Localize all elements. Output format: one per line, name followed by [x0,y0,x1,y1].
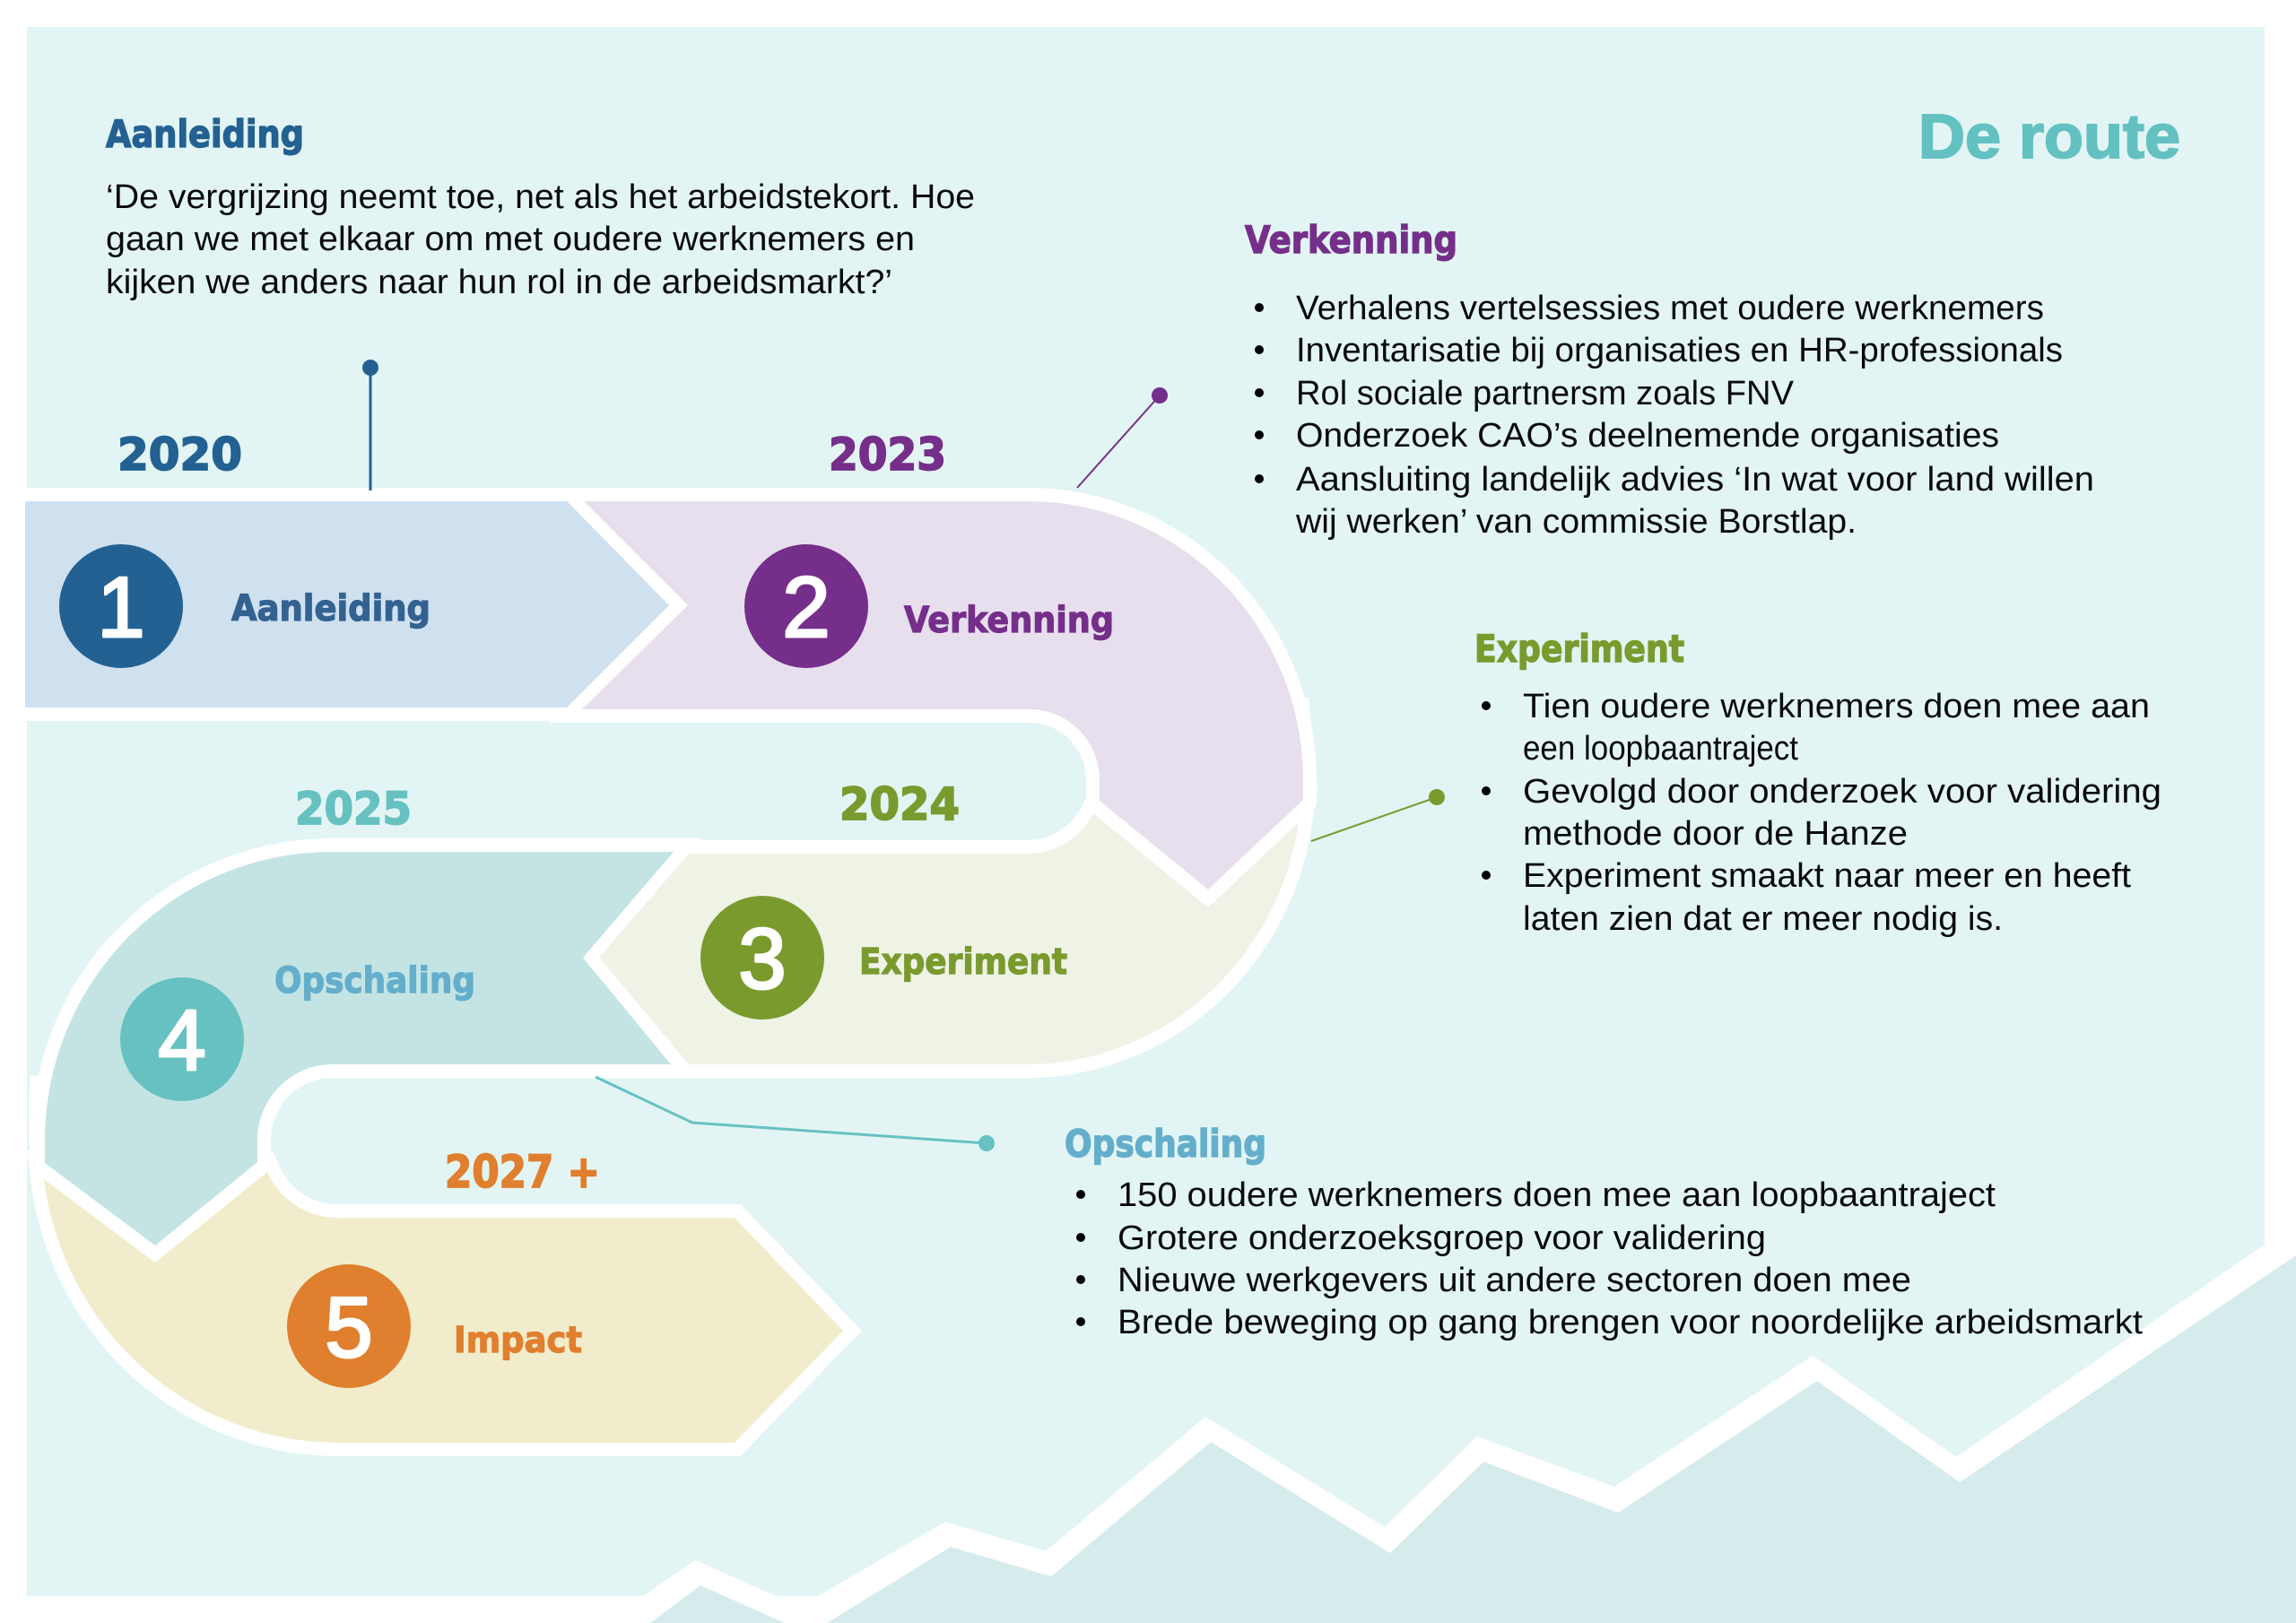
text block: Experiment: methode door de Hanze [1523,815,1908,853]
year 2027 +: 2027 + [445,1146,600,1198]
text block: Verkenning [1245,218,2094,541]
text block: Experiment [1474,627,2161,938]
year 2020: 2020 [117,429,242,481]
step 2: Verkenning [582,501,1303,890]
text block: Aanleiding: ‘De vergrijzing neemt toe, net als het arbeidstekort. Hoe [106,178,975,216]
year 2024: 2024 [839,778,960,830]
text block: Opschaling: Nieuwe werkgevers uit andere sectoren doen mee [1118,1262,1911,1299]
step 5: Impact: Impact [454,1320,582,1361]
text block: Opschaling: Brede beweging op gang brengen voor noordelijke arbeidsmarkt [1118,1304,2143,1341]
step 4: Opschaling: Opschaling [274,960,475,1002]
text block: Experiment: Experiment smaakt naar meer en heeft [1523,857,2131,895]
text block: Verkenning: Verkenning [1245,218,1457,262]
connector: Aanleiding pin [362,360,378,490]
text block: Verkenning: Verhalens vertelsessies met oudere werknemers [1296,290,2044,327]
text block: Aanleiding [106,112,975,301]
text block: Opschaling [1065,1122,2143,1341]
step 3: Experiment [599,813,1299,1064]
text block: Opschaling: Opschaling [1065,1122,1266,1166]
text block: Experiment: laten zien dat er meer nodig is. [1523,900,2003,938]
text block: Verkenning: Inventarisatie bij organisaties en HR-professionals [1296,332,2063,369]
text block: Aanleiding: kijken we anders naar hun rol in de arbeidsmarkt?’ [106,264,892,301]
text block: Opschaling: 150 oudere werknemers doen mee aan loopbaantraject [1118,1176,1996,1214]
connector: Verkenning pin [1077,387,1168,488]
white route outline [25,501,1317,1443]
text block: Verkenning: wij werken’ van commissie Borstlap. [1295,503,1857,541]
step 5: Impact [44,1172,843,1443]
step 1: Aanleiding: Aanleiding [231,588,430,629]
text block: Experiment: een loopbaantraject [1523,730,1798,768]
step 4: Opschaling: 4 [158,993,206,1089]
text block: Verkenning: Onderzoek CAO’s deelnemende organisaties [1296,417,1999,455]
text block: Experiment: Tien oudere werknemers doen mee aan [1523,688,2150,725]
step 1: Aanleiding [25,501,669,707]
step 3: Experiment: 3 [738,911,787,1007]
step 1: Aanleiding: 1 [97,560,145,655]
text block: Verkenning: Aansluiting landelijk advies ‘In wat voor land willen [1296,461,2094,499]
connector: Opschaling pin [596,1077,995,1151]
text block: Aanleiding: Aanleiding [106,112,304,156]
text block: Aanleiding: gaan we met elkaar om met oudere werknemers en [106,221,915,258]
step 2: Verkenning: 2 [782,560,831,655]
step 3: Experiment: Experiment [859,942,1067,983]
step 5: Impact: 5 [325,1280,373,1376]
year 2023: 2023 [829,429,946,481]
mountain line graphic [643,1224,2296,1623]
step 2: Verkenning: Verkenning [904,600,1114,641]
connector: Experiment pin [1311,789,1445,841]
text block: Opschaling: Grotere onderzoeksgroep voor validering [1118,1219,1766,1257]
title: De route [1918,101,2180,171]
text block: Experiment: Experiment [1474,627,1684,671]
step 4: Opschaling [45,852,674,1245]
text block: Experiment: Gevolgd door onderzoek voor validering [1523,773,2161,811]
text block: Verkenning: Rol sociale partnersm zoals FNV [1296,375,1795,412]
year 2025: 2025 [295,783,412,835]
